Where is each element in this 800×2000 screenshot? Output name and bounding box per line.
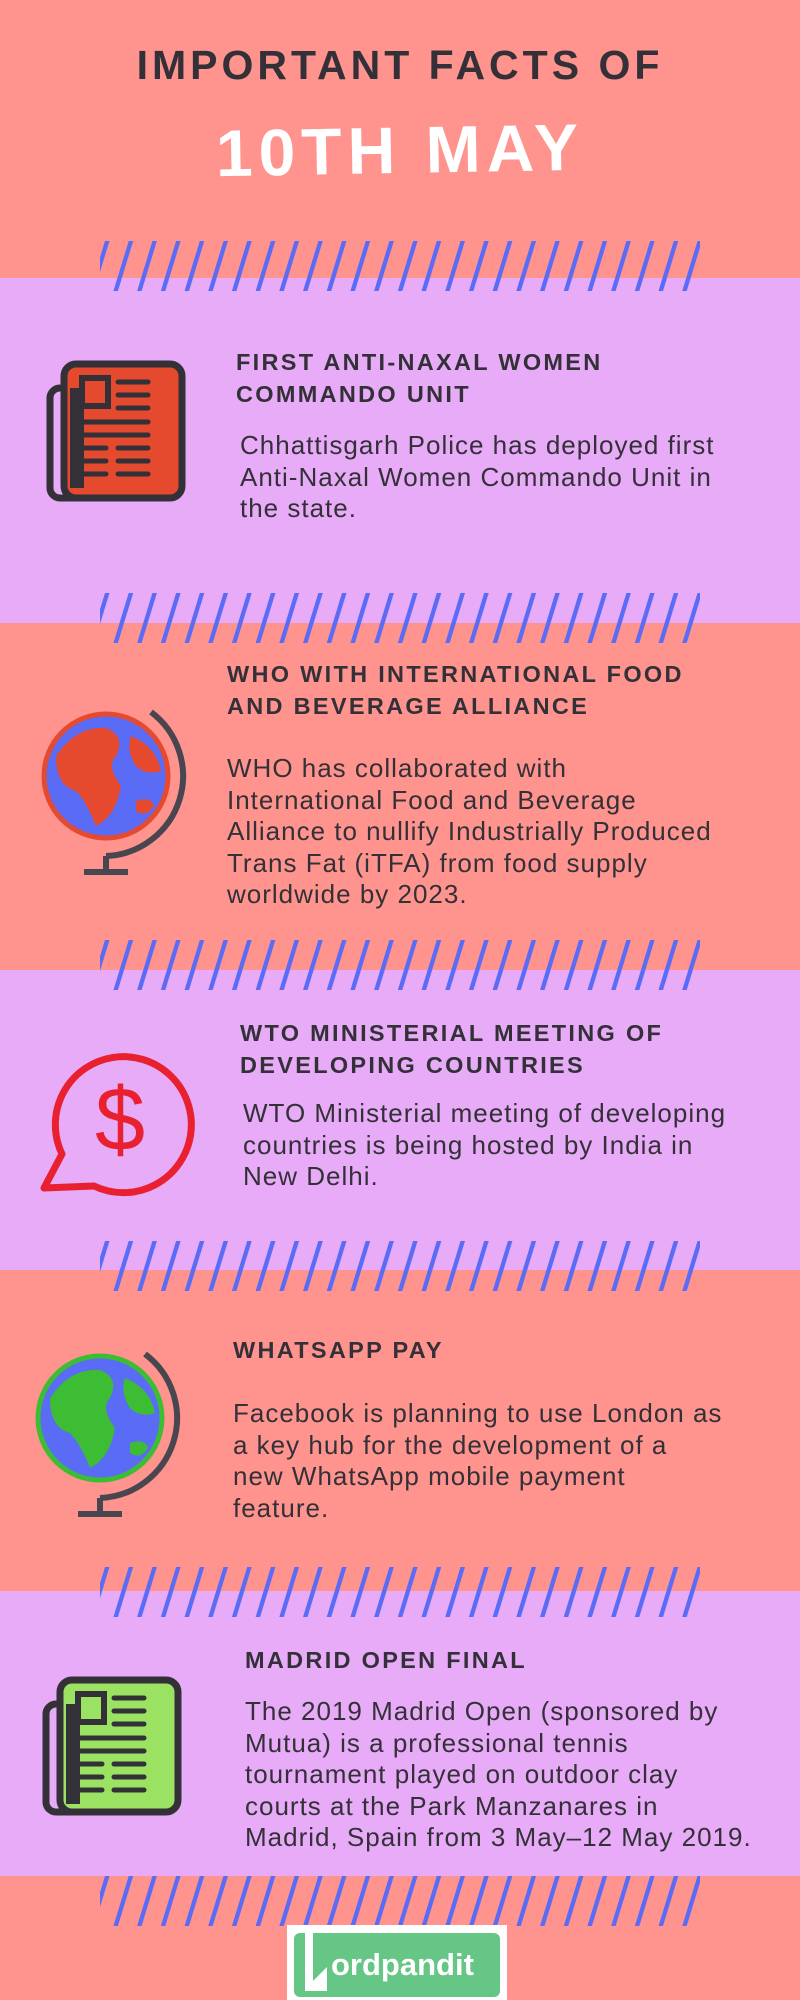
heading: fact 1: COMMANDO UNIT: [236, 381, 471, 407]
text: fact 3: New Delhi.: [243, 1161, 379, 1191]
text: fact 5: [245, 1696, 752, 1852]
footer band: [0, 1876, 800, 2000]
heading: fact 1: FIRST ANTI-NAXAL WOMEN: [236, 349, 603, 375]
icon: newspaper green: [42, 1676, 182, 1816]
text: fact 3: countries is being hosted by India in: [243, 1130, 693, 1160]
heading: fact 2: WHO WITH INTERNATIONAL FOOD: [227, 661, 684, 687]
hatch divider 2: [100, 593, 700, 643]
text: fact 5: courts at the Park Manzanares in: [245, 1790, 659, 1820]
icon: globe red: [42, 710, 186, 875]
icon: newspaper red: [46, 360, 186, 502]
logo: wordpandit: [287, 1925, 507, 2000]
hatch divider 3: [100, 940, 700, 990]
hatch divider 5: [100, 1567, 700, 1617]
heading: fact 2: AND BEVERAGE ALLIANCE: [227, 693, 589, 719]
text: fact 5: Madrid, Spain from 3 May–12 May 2019.: [245, 1822, 752, 1852]
text: fact 5: Mutua) is a professional tennis: [245, 1728, 629, 1758]
text: fact 4: [233, 1398, 722, 1522]
logo: wordpandit: ordpandit: [331, 1947, 474, 1982]
subtitle: date: 10TH MAY: [215, 110, 585, 190]
icon: dollar speech bubble: $: [95, 1070, 145, 1170]
text: fact 5: tournament played on outdoor clay: [245, 1759, 678, 1789]
text: fact 4: new WhatsApp mobile payment: [233, 1461, 626, 1491]
text: fact 2: WHO has collaborated with: [227, 753, 567, 783]
panel: fact 3 background: [0, 970, 800, 1270]
hatch divider 1: [100, 241, 700, 291]
text: fact 4: a key hub for the development of a: [233, 1430, 667, 1460]
icon: dollar speech bubble: [40, 1053, 195, 1196]
panel: fact 5 background: [0, 1591, 800, 1876]
text: fact 1: [240, 430, 714, 523]
text: fact 2: [227, 753, 712, 909]
text: fact 5: The 2019 Madrid Open (sponsored by: [245, 1696, 718, 1726]
text: fact 2: worldwide by 2023.: [227, 879, 468, 909]
text: fact 3: WTO Ministerial meeting of developing: [243, 1098, 726, 1128]
panel: fact 4 background: [0, 1270, 800, 1591]
heading: fact 3: [240, 1020, 663, 1078]
text: fact 3: [243, 1098, 726, 1191]
header band: [0, 0, 800, 278]
text: fact 4: feature.: [233, 1492, 329, 1522]
hatch divider 4: [100, 1241, 700, 1291]
icon: globe green: [36, 1352, 180, 1517]
panel: fact 1 background: [0, 278, 800, 623]
heading: fact 2: [227, 661, 684, 719]
text: fact 1: Anti-Naxal Women Commando Unit in: [240, 462, 712, 492]
heading: fact 5: MADRID OPEN FINAL: [245, 1647, 527, 1673]
text: fact 4: Facebook is planning to use London as: [233, 1398, 722, 1428]
text: fact 2: Trans Fat (iTFA) from food supply: [227, 848, 648, 878]
heading: fact 1: [236, 349, 603, 407]
title: IMPORTANT FACTS OF: [137, 42, 663, 88]
hatch divider 6: [100, 1876, 700, 1926]
heading: fact 4: WHATSAPP PAY: [233, 1337, 444, 1363]
heading: fact 3: DEVELOPING COUNTRIES: [240, 1052, 585, 1078]
text: fact 1: Chhattisgarh Police has deployed first: [240, 430, 714, 460]
text: fact 2: Alliance to nullify Industrially Produced: [227, 816, 712, 846]
text: fact 2: International Food and Beverage: [227, 784, 637, 814]
heading: fact 3: WTO MINISTERIAL MEETING OF: [240, 1020, 663, 1046]
panel: fact 2 background: [0, 623, 800, 970]
text: fact 1: the state.: [240, 493, 357, 523]
